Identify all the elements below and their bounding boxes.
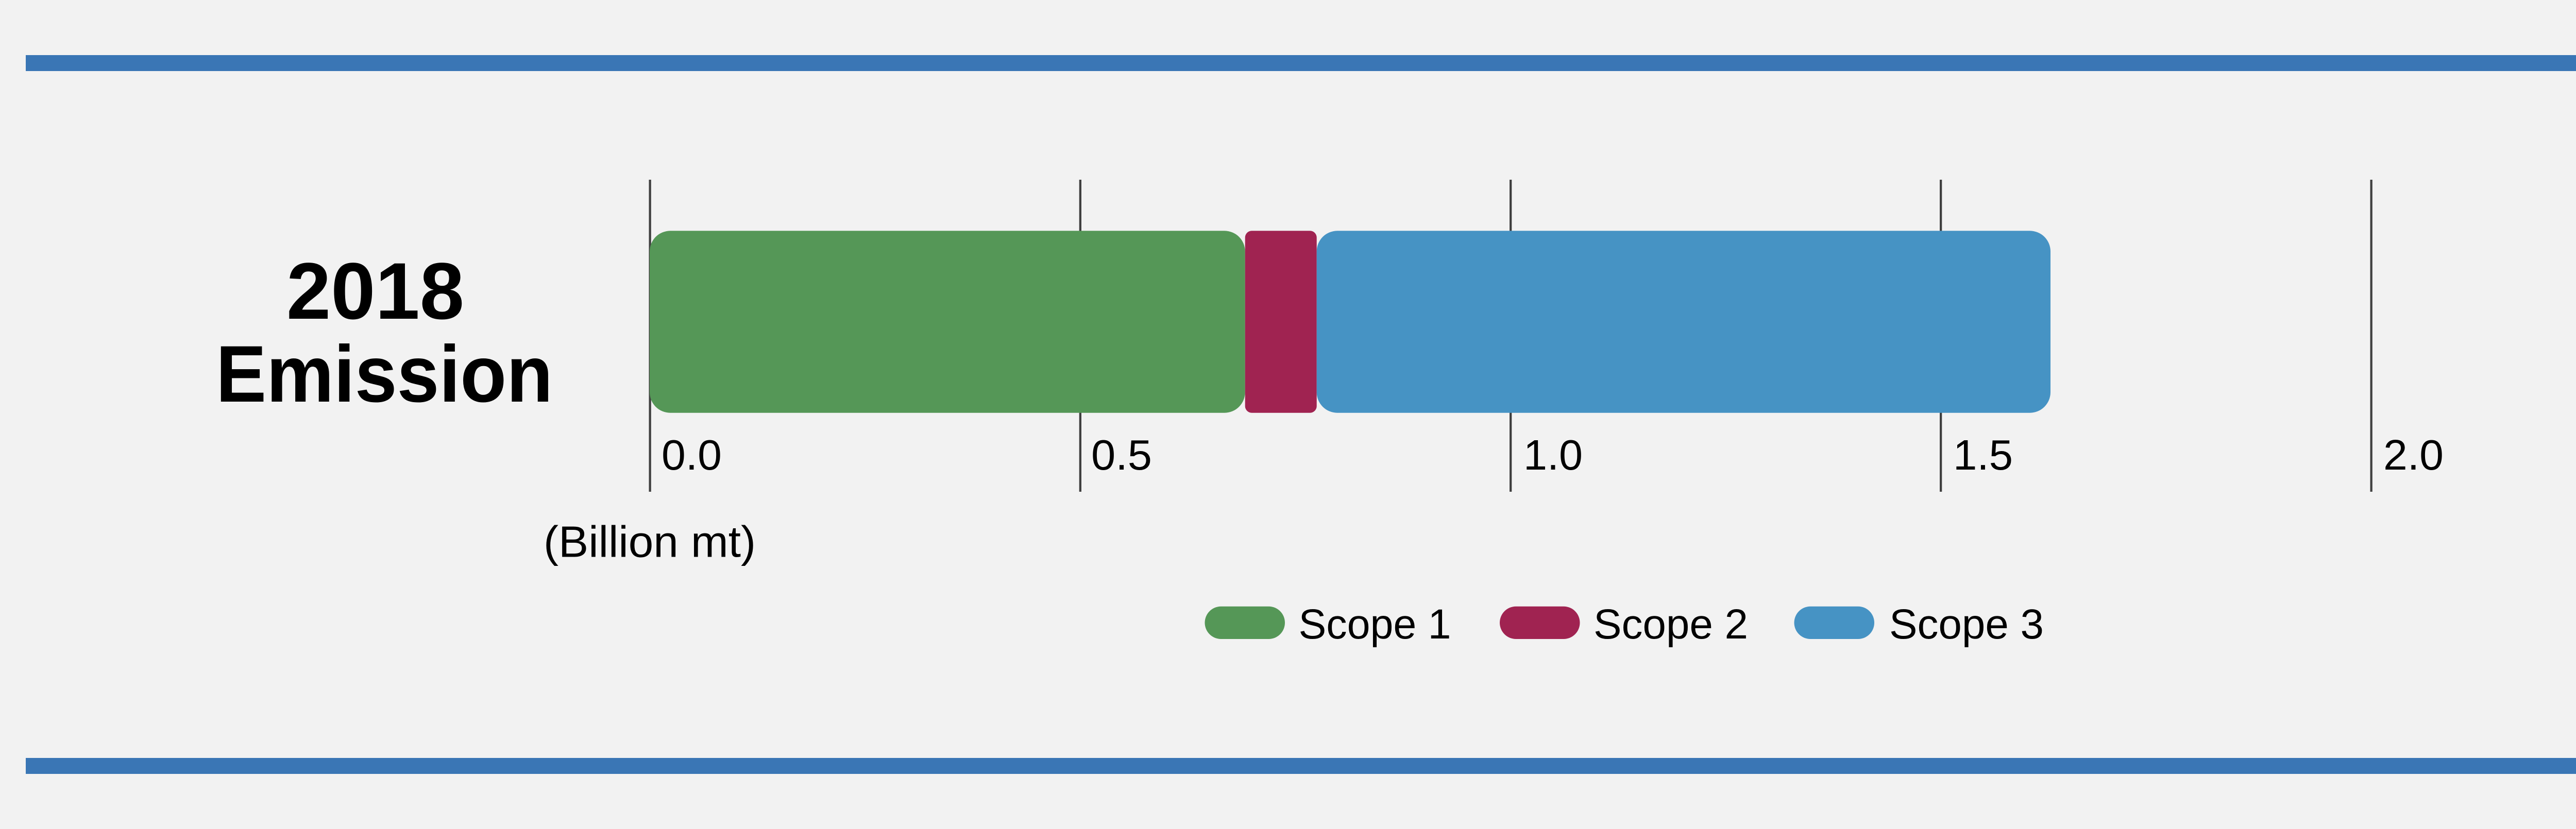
bar segment: Scope 1: [650, 231, 1245, 413]
bar segment: Scope 2: [1245, 231, 1317, 413]
title: 2018 Emission: [216, 247, 553, 419]
legend item: Scope 1: [1205, 601, 1451, 648]
top blue rule: [26, 55, 2576, 71]
bar segment: Scope 3: [1317, 231, 2050, 413]
axis grid lines: [649, 180, 2372, 492]
stacked bar: 2018 emissions: [650, 231, 2050, 413]
axis tick labels: [662, 431, 2444, 479]
legend item: Scope 3: Scope 3: [1889, 601, 2044, 648]
axis tick labels: 0.5: [1091, 431, 1152, 479]
legend item: Scope 2: [1500, 601, 1748, 648]
axis tick labels: 1.0: [1523, 431, 1583, 479]
legend: [1205, 601, 2044, 648]
axis unit label: (Billion mt): [544, 518, 756, 566]
axis tick labels: 0.0: [662, 431, 722, 479]
title: 2018 Emission: 2018: [286, 247, 464, 336]
axis tick labels: 2.0: [2383, 431, 2444, 479]
bottom blue rule: [26, 758, 2576, 774]
title: 2018 Emission: Emission: [216, 330, 553, 419]
axis tick labels: 1.5: [1953, 431, 2013, 479]
legend item: Scope 3: [1794, 601, 2044, 648]
legend item: Scope 2: Scope 2: [1594, 601, 1748, 648]
legend item: Scope 1: Scope 1: [1298, 601, 1451, 648]
